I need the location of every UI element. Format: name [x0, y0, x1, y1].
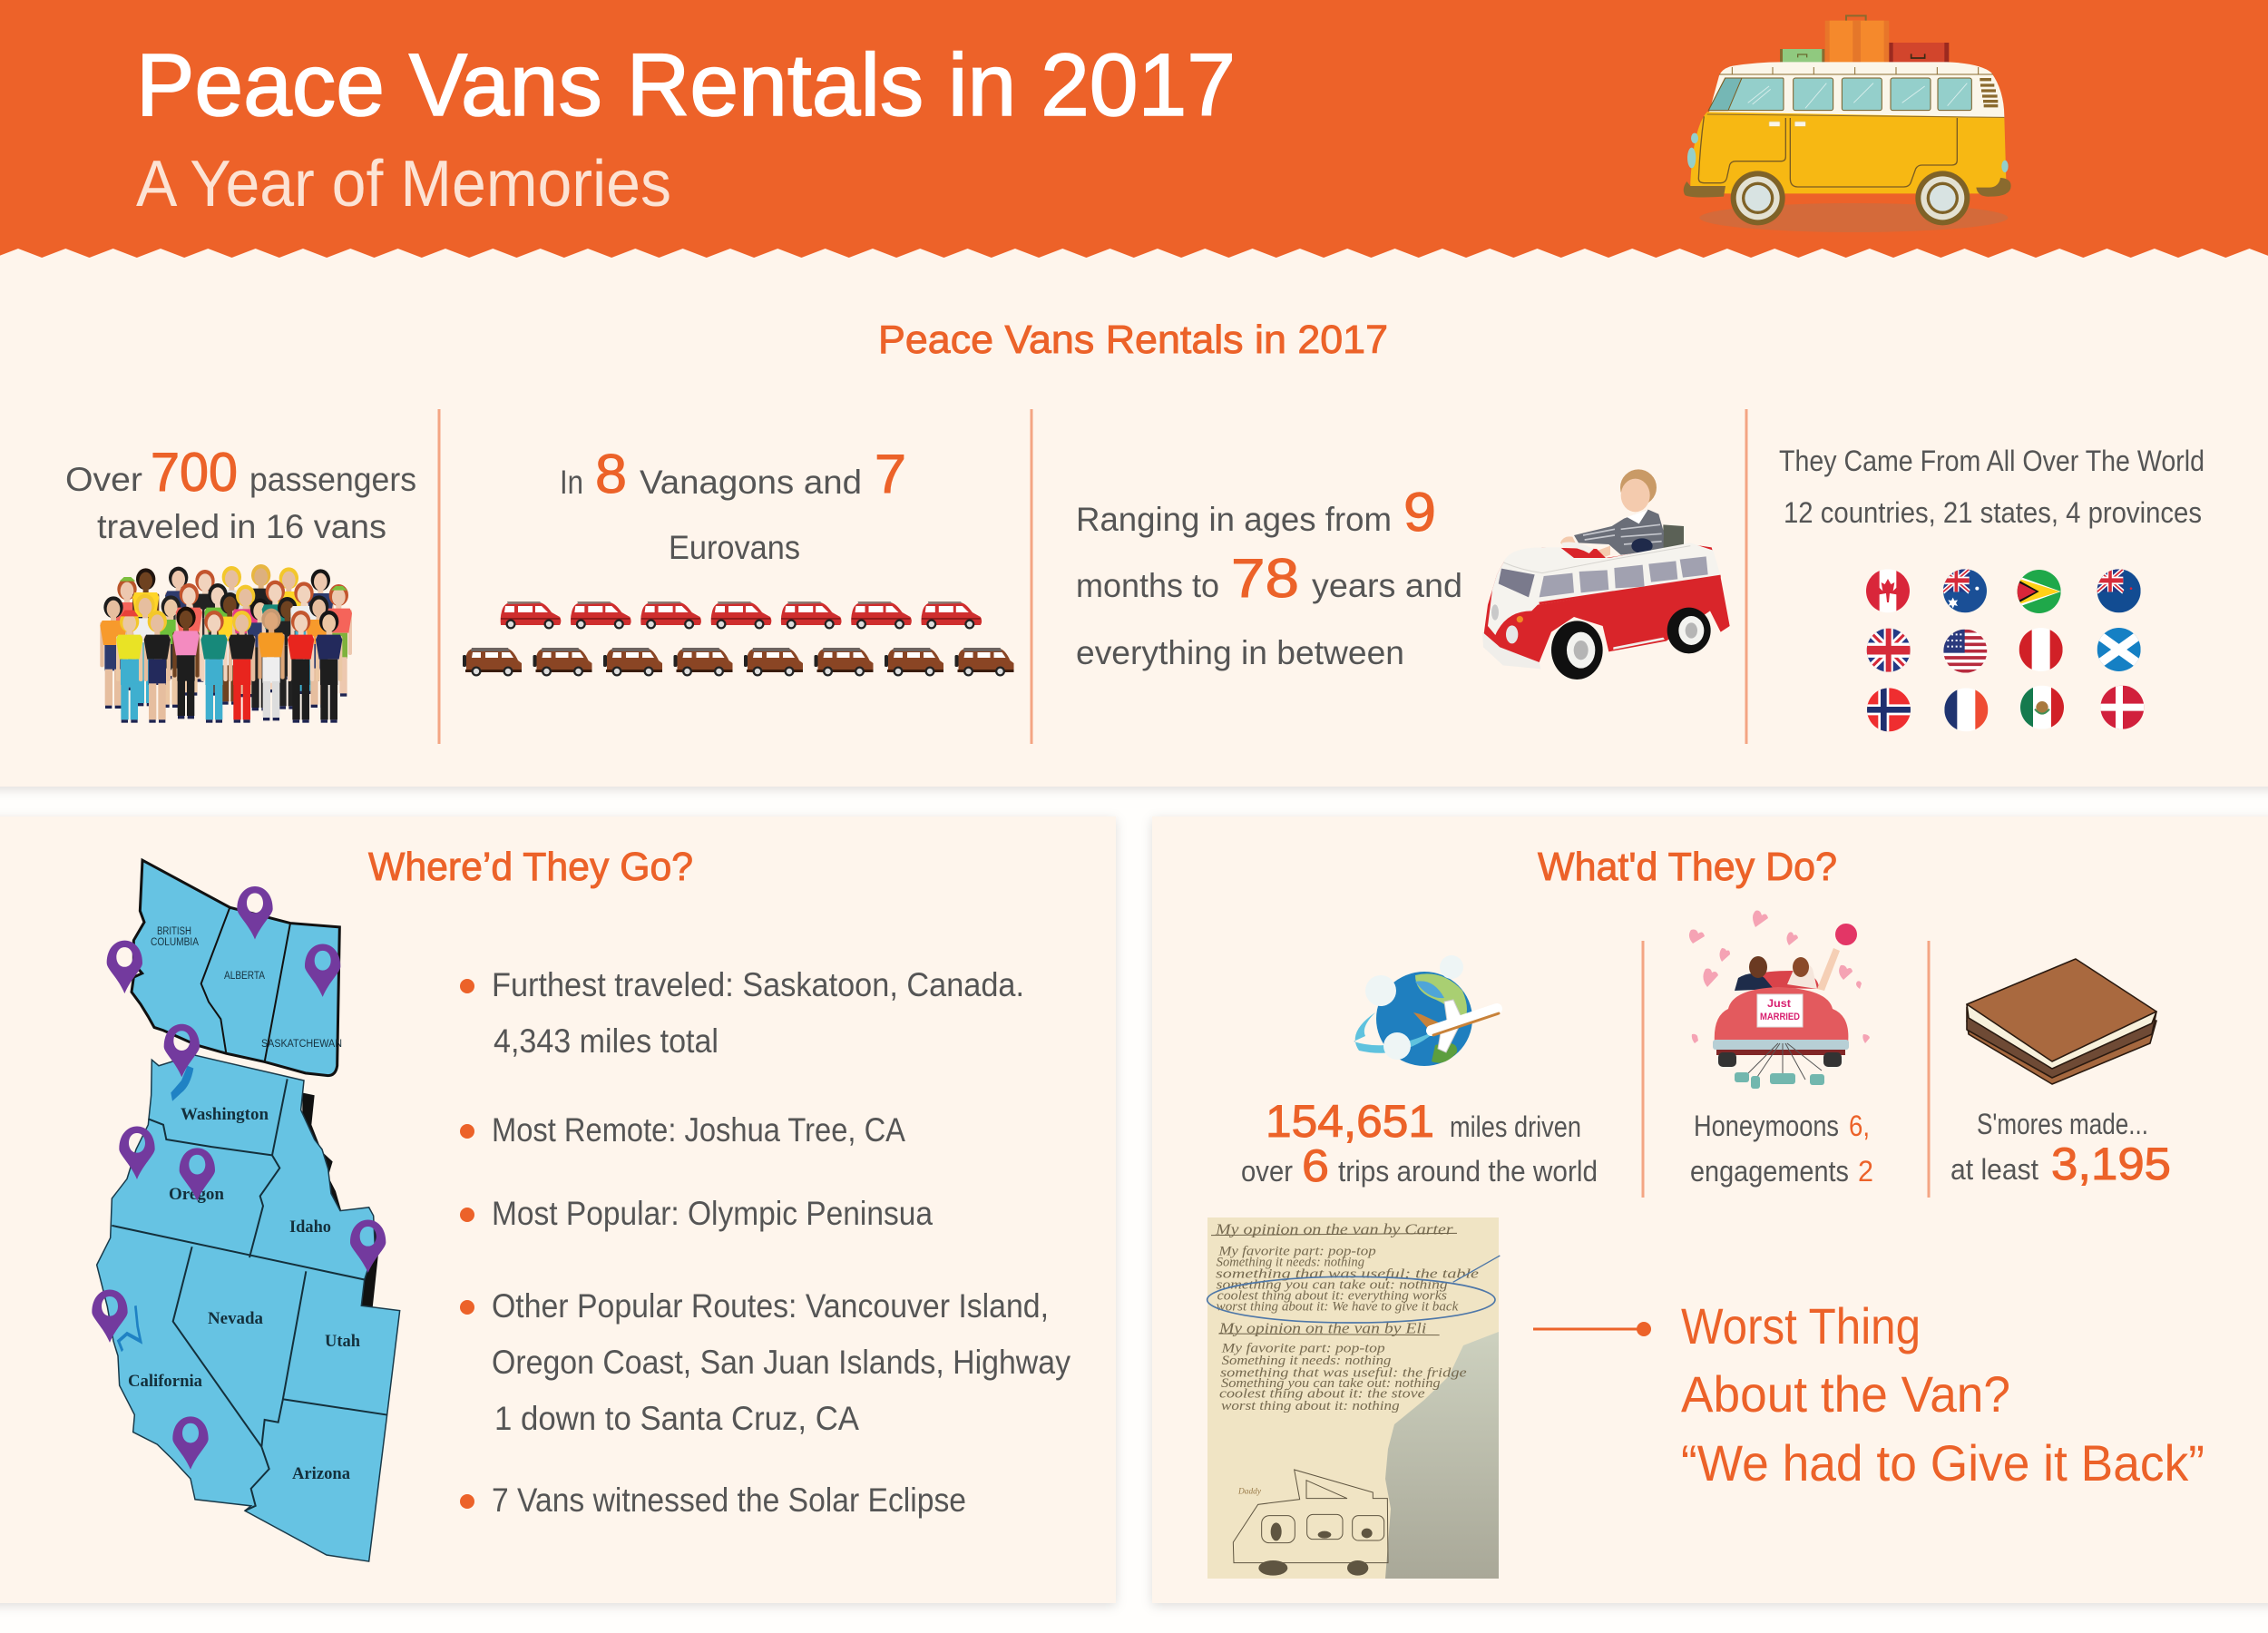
stat: passengers: Over	[65, 461, 142, 498]
flag: Norway	[1867, 688, 1911, 731]
stat: vans: 8	[595, 444, 627, 504]
list of travel facts: 4,343 miles total	[494, 1022, 719, 1060]
icons: brown eurovans	[463, 648, 1014, 677]
map labels: Utah	[325, 1332, 360, 1351]
photo: handwritten note: worst thing about it: nothing	[1221, 1399, 1400, 1413]
photo: handwritten note: something that was useful: the fridge	[1220, 1365, 1467, 1380]
map labels: ALBERTA	[224, 971, 265, 982]
stat: passengers	[65, 442, 416, 545]
stat: honeymoons: 2	[1858, 1155, 1873, 1188]
subtitle: A Year of Memories	[136, 148, 671, 220]
map pins	[92, 886, 386, 1470]
icons: twelve round flags	[1866, 569, 2144, 731]
stat: ages: 9	[1403, 482, 1436, 543]
list of travel facts: Other Popular Routes: Vancouver Island,	[492, 1287, 1049, 1325]
photo: handwritten note: Something it needs: nothing	[1222, 1354, 1391, 1368]
stat: s'mores: at least	[1950, 1153, 2038, 1186]
stat: honeymoons	[1690, 1110, 1873, 1188]
dividers in right panel	[1643, 941, 1929, 1198]
icon: just married car: MARRIED	[1760, 1012, 1800, 1022]
flag: Guyana	[2018, 570, 2061, 613]
stat: miles	[1241, 1096, 1598, 1191]
quote: worst thing: “We had to Give it Back”	[1681, 1434, 2204, 1491]
photo: handwritten note: something you can take out: nothing	[1217, 1278, 1448, 1293]
stat: passengers: passengers	[249, 461, 416, 498]
list of travel facts	[460, 966, 1070, 1519]
stat: miles: trips around the world	[1338, 1155, 1598, 1188]
text: visitor origins	[1779, 445, 2204, 529]
photo: handwritten note: Something it needs: nothing	[1217, 1256, 1364, 1270]
right panel: what they did	[1152, 816, 2268, 1603]
stat: honeymoons: 6,	[1849, 1110, 1870, 1142]
flag: Australia	[1943, 569, 1987, 612]
photo: handwritten note: Daddy	[1237, 1488, 1262, 1497]
stat: passengers: 700	[151, 442, 238, 503]
stat: ages: Ranging in ages from	[1076, 501, 1392, 538]
photo: handwritten note: My favorite part: pop-top	[1220, 1342, 1385, 1356]
list of travel facts: Furthest traveled: Saskatoon, Canada.	[492, 966, 1024, 1003]
map labels: Washington	[181, 1105, 269, 1124]
top panel background	[0, 245, 2268, 787]
icons: red vanagons	[501, 601, 982, 630]
icon: yellow camper van with luggage	[1684, 15, 2011, 232]
flag: Canada	[1866, 569, 1910, 612]
photo: handwritten note: coolest thing about it: everything works	[1217, 1288, 1447, 1303]
map labels	[128, 926, 360, 1483]
flag: United States	[1943, 630, 1987, 673]
title: Peace Vans Rentals in 2017	[136, 35, 1236, 134]
photo: handwritten note: worst thing about it: We have to give it back	[1217, 1300, 1459, 1315]
quote: worst thing: About the Van?	[1681, 1365, 2010, 1423]
text: visitor origins: 12 countries, 21 states, 4 provinces	[1784, 496, 2202, 529]
stat: miles: miles driven	[1450, 1110, 1581, 1143]
photo: handwritten note	[1207, 1217, 1500, 1579]
list of travel facts: Most Remote: Joshua Tree, CA	[492, 1111, 905, 1149]
stat: vans: In	[560, 464, 583, 501]
flag: New Zealand	[2097, 569, 2141, 612]
stat: s'mores: 3,195	[2051, 1139, 2171, 1189]
stat: miles: over	[1241, 1155, 1293, 1188]
photo: handwritten note: My opinion on the van by Carter	[1215, 1221, 1453, 1238]
stat: vans: 7	[875, 444, 906, 504]
photo: handwritten note: something that was useful: the table	[1216, 1266, 1480, 1281]
stat: vans: Eurovans	[669, 529, 800, 566]
stat: honeymoons: Honeymoons	[1694, 1110, 1839, 1142]
icon: globe and airplane	[1354, 955, 1499, 1066]
arrow pointing to quote	[1533, 1322, 1651, 1336]
flag: Denmark	[2100, 686, 2144, 729]
map labels: Arizona	[292, 1464, 350, 1483]
stat: vans: Vanagons and	[640, 464, 862, 501]
map labels: SASKATCHEWAN	[261, 1039, 342, 1050]
map labels: Idaho	[289, 1217, 331, 1237]
map labels: BRITISH	[157, 926, 191, 937]
photo: handwritten note: Something you can take out: nothing	[1221, 1376, 1441, 1391]
text: visitor origins: They Came From All Over The World	[1779, 445, 2204, 477]
icon: crowd of people	[100, 564, 352, 723]
list of travel facts: Most Popular: Olympic Peninsua	[492, 1195, 933, 1232]
heading: rentals: Peace Vans Rentals in 2017	[878, 318, 1388, 362]
heading: what: What'd They Do?	[1538, 845, 1837, 889]
quote: worst thing: Worst Thing	[1681, 1297, 1921, 1354]
stat: ages: 78	[1231, 548, 1299, 609]
header banner with zigzag edge	[0, 0, 2268, 258]
photo: handwritten note: My favorite part: pop-top	[1217, 1244, 1376, 1258]
stat: honeymoons: engagements	[1690, 1155, 1849, 1188]
dividers in top panel	[439, 409, 1746, 744]
left panel: where they went	[0, 816, 1116, 1603]
quote: worst thing	[1681, 1297, 2204, 1491]
icon: just married car	[1689, 911, 1870, 1089]
list of travel facts: 1 down to Santa Cruz, CA	[494, 1400, 859, 1437]
photo: handwritten note: coolest thing about it: the stove	[1219, 1387, 1425, 1402]
flag: United Kingdom	[1867, 629, 1911, 672]
stat: vans	[560, 444, 906, 566]
stat: miles: 154,651	[1266, 1096, 1434, 1147]
stat: ages: everything in between	[1076, 634, 1404, 671]
map labels: COLUMBIA	[151, 937, 199, 948]
photo: handwritten note: My opinion on the van by Eli	[1218, 1319, 1427, 1336]
map labels: Nevada	[208, 1309, 263, 1328]
flag: Mexico	[2020, 686, 2064, 729]
icon: child in red toy van	[1482, 469, 1730, 680]
flag: Scotland	[2097, 628, 2141, 671]
map: western US and Canada	[97, 860, 400, 1561]
stat: ages	[1076, 482, 1462, 671]
icon: s'more	[1967, 959, 2156, 1084]
icon: just married car: Just	[1767, 997, 1791, 1010]
stat: miles: 6	[1302, 1140, 1329, 1191]
stat: ages: months to	[1076, 567, 1219, 604]
stat: s'mores: S'mores made...	[1977, 1108, 2148, 1140]
stat: ages: years and	[1312, 567, 1462, 604]
heading: where: Where’d They Go?	[368, 845, 693, 889]
flag: Peru	[2019, 628, 2063, 671]
list of travel facts: 7 Vans witnessed the Solar Eclipse	[492, 1481, 966, 1519]
map labels: Oregon	[169, 1185, 224, 1204]
stat: passengers: traveled in 16 vans	[97, 508, 386, 545]
list of travel facts: Oregon Coast, San Juan Islands, Highway	[492, 1344, 1070, 1381]
stat: s'mores	[1950, 1108, 2171, 1189]
map labels: California	[128, 1372, 202, 1391]
flag: France	[1944, 688, 1988, 731]
